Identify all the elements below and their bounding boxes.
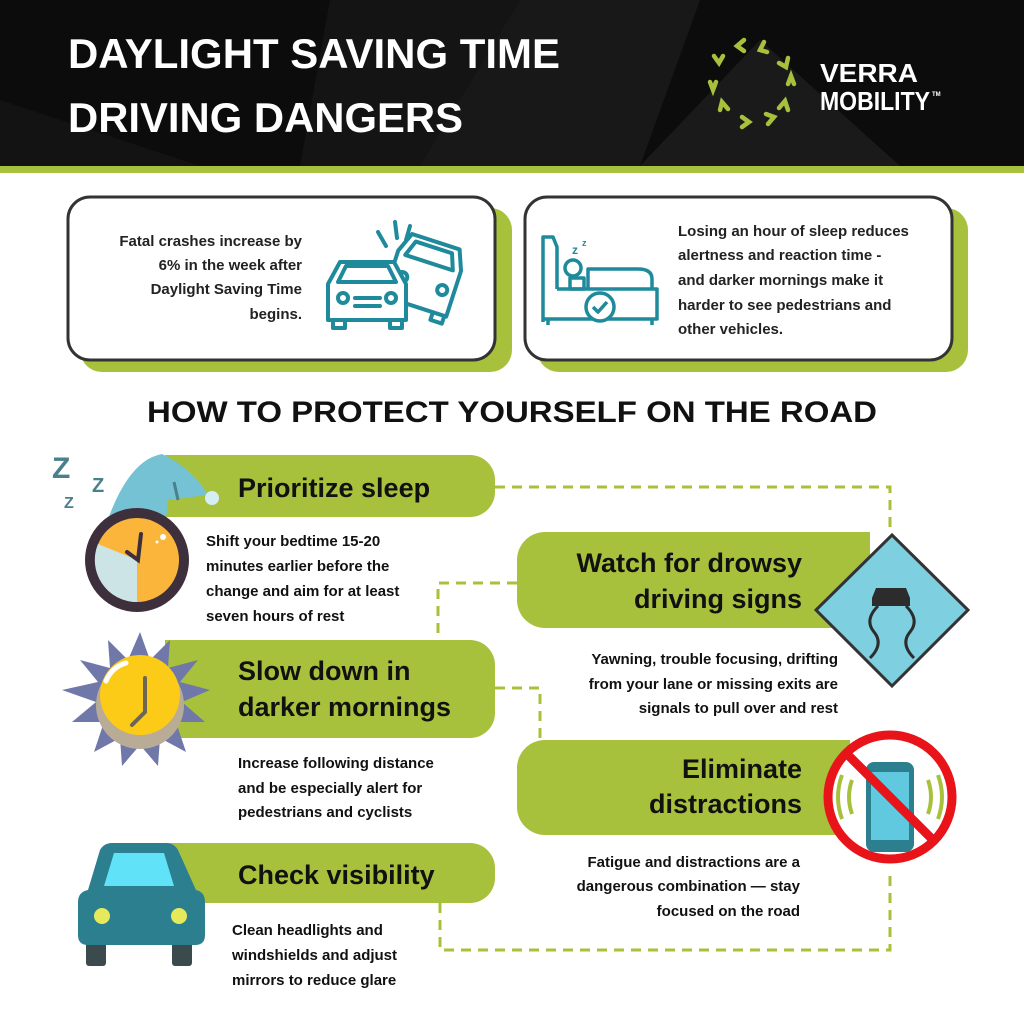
logo: verra mobility: VERRA: [820, 58, 918, 88]
pill: check visibility: [165, 843, 495, 903]
body: prioritize sleep: change and aim for at least: [206, 583, 399, 600]
icon: crashed cars: [328, 222, 467, 328]
body: drowsy signs: [589, 651, 838, 717]
card text: fatal crashes: begins.: [249, 306, 302, 323]
pill: slow down: [165, 640, 495, 738]
section heading: HOW TO PROTECT YOURSELF ON THE ROAD: [147, 396, 877, 429]
icon: clock with night cap: Z: [92, 475, 104, 497]
body: drowsy signs: from your lane or missing exits are: [589, 676, 838, 693]
body: prioritize sleep: minutes earlier before the: [206, 558, 389, 575]
body: prioritize sleep: seven hours of rest: [206, 608, 344, 625]
card text: sleep loss: [678, 223, 909, 338]
pill: prioritize sleep: Prioritize sleep: [238, 473, 430, 503]
logo: verra mobility: [710, 40, 941, 127]
connectors: dashed lines: [438, 487, 890, 950]
icon: no phone: [824, 731, 956, 863]
body: slow down: pedestrians and cyclists: [238, 804, 412, 821]
card: sleep loss: [525, 197, 968, 372]
pill: slow down: Slow down in: [238, 656, 410, 686]
body: check visibility: [231, 922, 397, 989]
body: slow down: and be especially alert for: [238, 780, 422, 797]
card text: fatal crashes: [119, 233, 303, 323]
icon: bed: [543, 237, 657, 325]
pill: eliminate distractions: distractions: [649, 789, 802, 819]
pill: drowsy signs: [517, 532, 870, 628]
pill: slow down: darker mornings: [238, 692, 451, 722]
title: DRIVING DANGERS: [68, 94, 463, 141]
body: slow down: [238, 755, 434, 821]
body: prioritize sleep: [206, 533, 399, 625]
card text: sleep loss: harder to see pedestrians and: [678, 297, 891, 314]
title: DAYLIGHT SAVING TIME: [68, 30, 560, 77]
pill: eliminate distractions: Eliminate: [682, 754, 802, 784]
body: check visibility: mirrors to reduce glare: [232, 972, 396, 989]
icon: clock with night cap: [52, 452, 219, 612]
body: check visibility: windshields and adjust: [231, 947, 397, 964]
card text: sleep loss: and darker mornings make it: [678, 272, 883, 289]
icon: clock with night cap: Z: [64, 495, 74, 512]
pill: drowsy signs: driving signs: [634, 584, 802, 614]
logo: verra mobility: TM: [932, 92, 941, 98]
card text: fatal crashes: Fatal crashes increase by: [119, 233, 303, 250]
title: [68, 30, 560, 141]
body: prioritize sleep: Shift your bedtime 15-20: [206, 533, 380, 550]
card text: fatal crashes: 6% in the week after: [159, 257, 302, 274]
card text: sleep loss: alertness and reaction time -: [678, 247, 881, 264]
body: eliminate distractions: Fatigue and distractions are a: [587, 854, 801, 871]
card: fatal crashes: [68, 197, 512, 372]
icon: slippery road sign: [816, 535, 968, 686]
body: drowsy signs: Yawning, trouble focusing, drifting: [591, 651, 838, 668]
card text: fatal crashes: Daylight Saving Time: [151, 281, 302, 298]
header background: [0, 0, 1024, 173]
body: eliminate distractions: [577, 854, 801, 920]
body: check visibility: Clean headlights and: [232, 922, 383, 939]
icon: bed: z: [572, 243, 578, 257]
pill: prioritize sleep: [165, 455, 495, 517]
body: eliminate distractions: dangerous combination — stay: [577, 878, 801, 895]
icon: sun clock: [62, 632, 210, 766]
icon: clock with night cap: Z: [52, 452, 70, 485]
pill: drowsy signs: Watch for drowsy: [576, 548, 802, 578]
pill: check visibility: Check visibility: [238, 860, 435, 890]
card text: sleep loss: other vehicles.: [678, 321, 783, 338]
icon: bed: z: [582, 238, 587, 248]
body: drowsy signs: signals to pull over and rest: [639, 700, 838, 717]
body: slow down: Increase following distance: [238, 755, 434, 772]
logo: verra mobility: MOBILITY: [820, 86, 930, 116]
card text: sleep loss: Losing an hour of sleep reduces: [678, 223, 909, 240]
body: eliminate distractions: focused on the road: [657, 903, 800, 920]
pill: eliminate distractions: [517, 740, 850, 835]
icon: car front: [78, 843, 205, 966]
